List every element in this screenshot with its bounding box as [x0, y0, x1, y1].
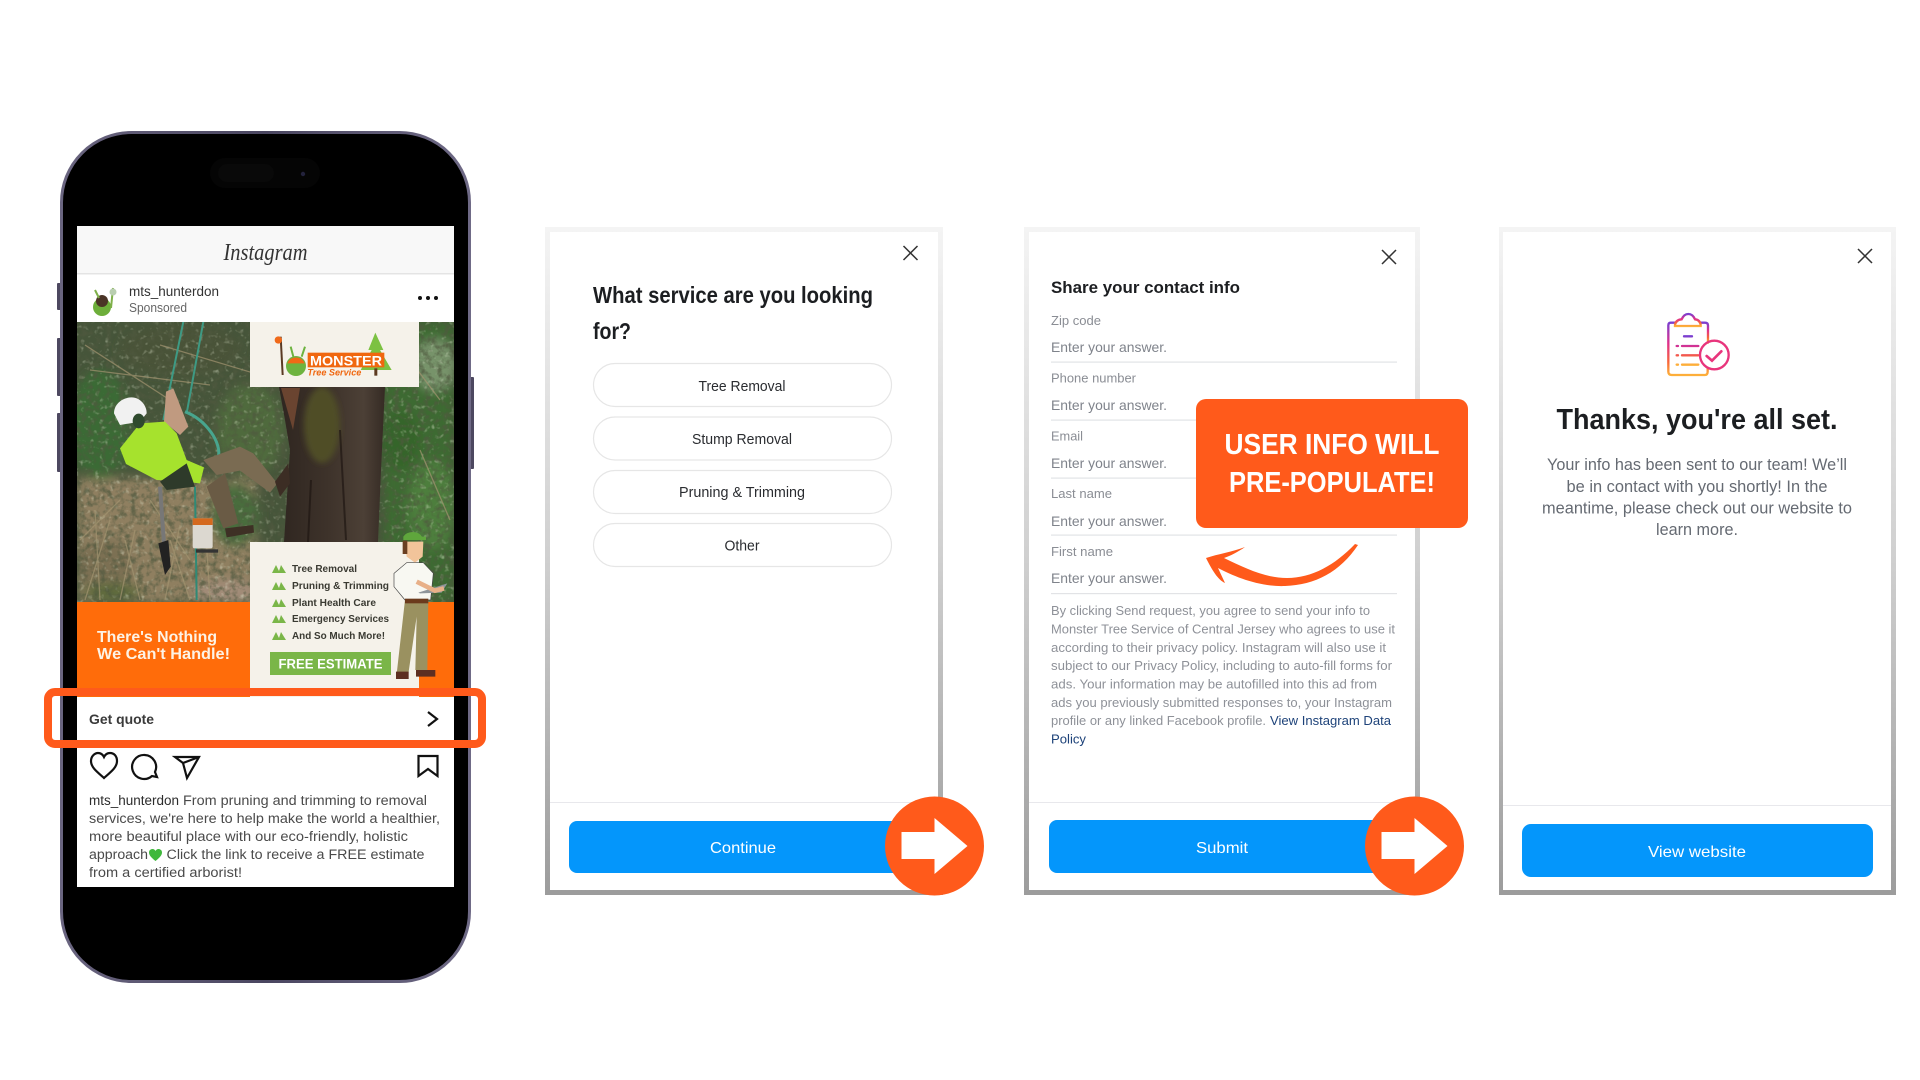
post header: [93, 283, 438, 316]
action icons: [91, 753, 438, 779]
confirmation body: Your info has been sent to our team! We’ll: [1547, 456, 1847, 474]
form fields: Phone number: [1051, 370, 1137, 386]
phone body: [62, 132, 470, 982]
icon: close: [904, 246, 918, 260]
instagram screen: [70, 226, 457, 887]
question heading: for?: [593, 318, 631, 344]
service list: Pruning & Trimming: [292, 581, 389, 592]
icon: send: [175, 757, 199, 778]
caption: From pruning and trimming to removal: [183, 793, 427, 808]
caption: approach: [89, 847, 148, 862]
phone side buttons: [57, 283, 474, 472]
form fields: [1051, 313, 1397, 594]
logo panel: [250, 322, 419, 387]
service list: Tree Removal: [292, 564, 357, 575]
ad photo: arborist climbing tree: [70, 322, 457, 604]
get quote row: Get quote: [89, 711, 154, 727]
get quote row: [77, 697, 454, 741]
caption: more beautiful place with our eco-friendly, holistic: [89, 829, 408, 844]
caption: from a certified arborist!: [89, 865, 242, 880]
confirmation body: [1542, 456, 1852, 539]
view website button: View website: [1648, 844, 1746, 861]
free estimate badge: [270, 652, 391, 675]
ad headline: We Can't Handle!: [97, 646, 230, 663]
logo panel: MONSTER: [310, 352, 382, 368]
legal text: Monster Tree Service of Central Jersey who agrees to use it: [1051, 622, 1395, 636]
climber figure: [114, 322, 290, 600]
legal text: View Instagram Data: [1270, 713, 1392, 728]
form fields: Enter your answer.: [1051, 513, 1167, 529]
icon: close: [1858, 249, 1872, 263]
legal text: profile or any linked Facebook profile.: [1051, 713, 1266, 728]
caption: services, we're here to help make the world a healthier,: [89, 811, 440, 826]
post header: mts_hunterdon: [129, 283, 219, 299]
legal text: ads. Your information may be autofilled into this ad from: [1051, 676, 1377, 692]
icon: bookmark: [418, 756, 438, 776]
submit button: [1049, 820, 1400, 873]
arrow badge 2: [1365, 796, 1464, 896]
free estimate badge: FREE ESTIMATE: [278, 656, 382, 672]
legal text: according to their privacy policy. Instagram will also use it: [1051, 640, 1386, 655]
tree trunk: [279, 387, 385, 542]
avatar: [93, 288, 116, 316]
legal text: ads you previously submitted responses to, your Instagram: [1051, 695, 1392, 710]
continue button: Continue: [710, 840, 776, 857]
confirmation body: learn more.: [1656, 521, 1738, 539]
icon: clipboard check: [1668, 314, 1729, 375]
form fields: First name: [1051, 544, 1113, 559]
icon: close: [1382, 250, 1396, 264]
legal text: By clicking Send request, you agree to send your info to: [1051, 603, 1370, 618]
panel: confirmation: [1499, 227, 1896, 895]
thanks heading: Thanks, you're all set.: [1556, 404, 1838, 436]
orange band left: [77, 602, 250, 697]
form fields: Zip code: [1051, 313, 1101, 328]
ad headline: [97, 629, 230, 663]
more dots: [418, 296, 438, 300]
arrow badge 1: [885, 796, 984, 896]
panel: service question: [545, 227, 943, 895]
answer options: Stump Removal: [692, 432, 792, 448]
form fields: Enter your answer.: [1051, 455, 1167, 471]
form fields: Enter your answer.: [1051, 397, 1167, 413]
icon: heart: [91, 753, 117, 778]
curved arrow: [1206, 544, 1358, 586]
service list: Emergency Services: [292, 614, 389, 625]
caption: mts_hunterdon: [89, 793, 179, 808]
answer options: Tree Removal: [698, 379, 786, 395]
view website button: [1522, 824, 1873, 877]
post header: Sponsored: [129, 300, 187, 315]
form fields: Last name: [1051, 486, 1112, 501]
form fields: Enter your answer.: [1051, 339, 1167, 355]
confirmation body: be in contact with you shortly! In the: [1566, 478, 1828, 496]
branches: [80, 340, 450, 600]
question heading: What service are you looking: [593, 282, 873, 308]
legal text: subject to our Privacy Policy, including to auto-fill forms for: [1051, 658, 1393, 673]
form heading: Share your contact info: [1051, 278, 1240, 297]
logo panel: Tree Service: [307, 368, 361, 378]
legal text: Policy: [1051, 732, 1086, 746]
dynamic island: [210, 158, 320, 188]
answer options: Other: [724, 538, 760, 554]
callout: user info will pre-populate: PRE-POPULATE!: [1229, 467, 1435, 499]
submit button: Submit: [1196, 840, 1249, 857]
confirmation body: meantime, please check out our website to: [1542, 500, 1852, 518]
icon: comment: [132, 755, 157, 779]
form fields: Email: [1051, 428, 1083, 444]
service list: Plant Health Care: [292, 598, 376, 609]
phone mockup: [57, 132, 474, 982]
instagram top bar: [77, 226, 454, 274]
icon: green heart: [149, 849, 162, 861]
answer options: [594, 364, 892, 566]
services panel: [250, 542, 419, 697]
instagram top bar: Instagram: [223, 240, 308, 266]
callout: user info will pre-populate: [1196, 399, 1468, 528]
highlight box around get quote: [48, 692, 482, 744]
callout: user info will pre-populate: USER INFO WILL: [1224, 429, 1440, 461]
ad headline: There's Nothing: [97, 629, 217, 646]
service list: And So Much More!: [292, 631, 385, 642]
form fields: Enter your answer.: [1051, 570, 1167, 586]
continue button: [569, 821, 920, 873]
caption: [89, 793, 440, 880]
service list: [272, 564, 389, 642]
question heading: [593, 282, 873, 344]
caption: Click the link to receive a FREE estimate: [166, 847, 424, 862]
orange band right: [419, 602, 454, 697]
panel: contact form: [1024, 227, 1420, 895]
legal text: [1051, 603, 1395, 746]
answer options: Pruning & Trimming: [679, 485, 805, 501]
cartoon arborist: [394, 532, 447, 679]
